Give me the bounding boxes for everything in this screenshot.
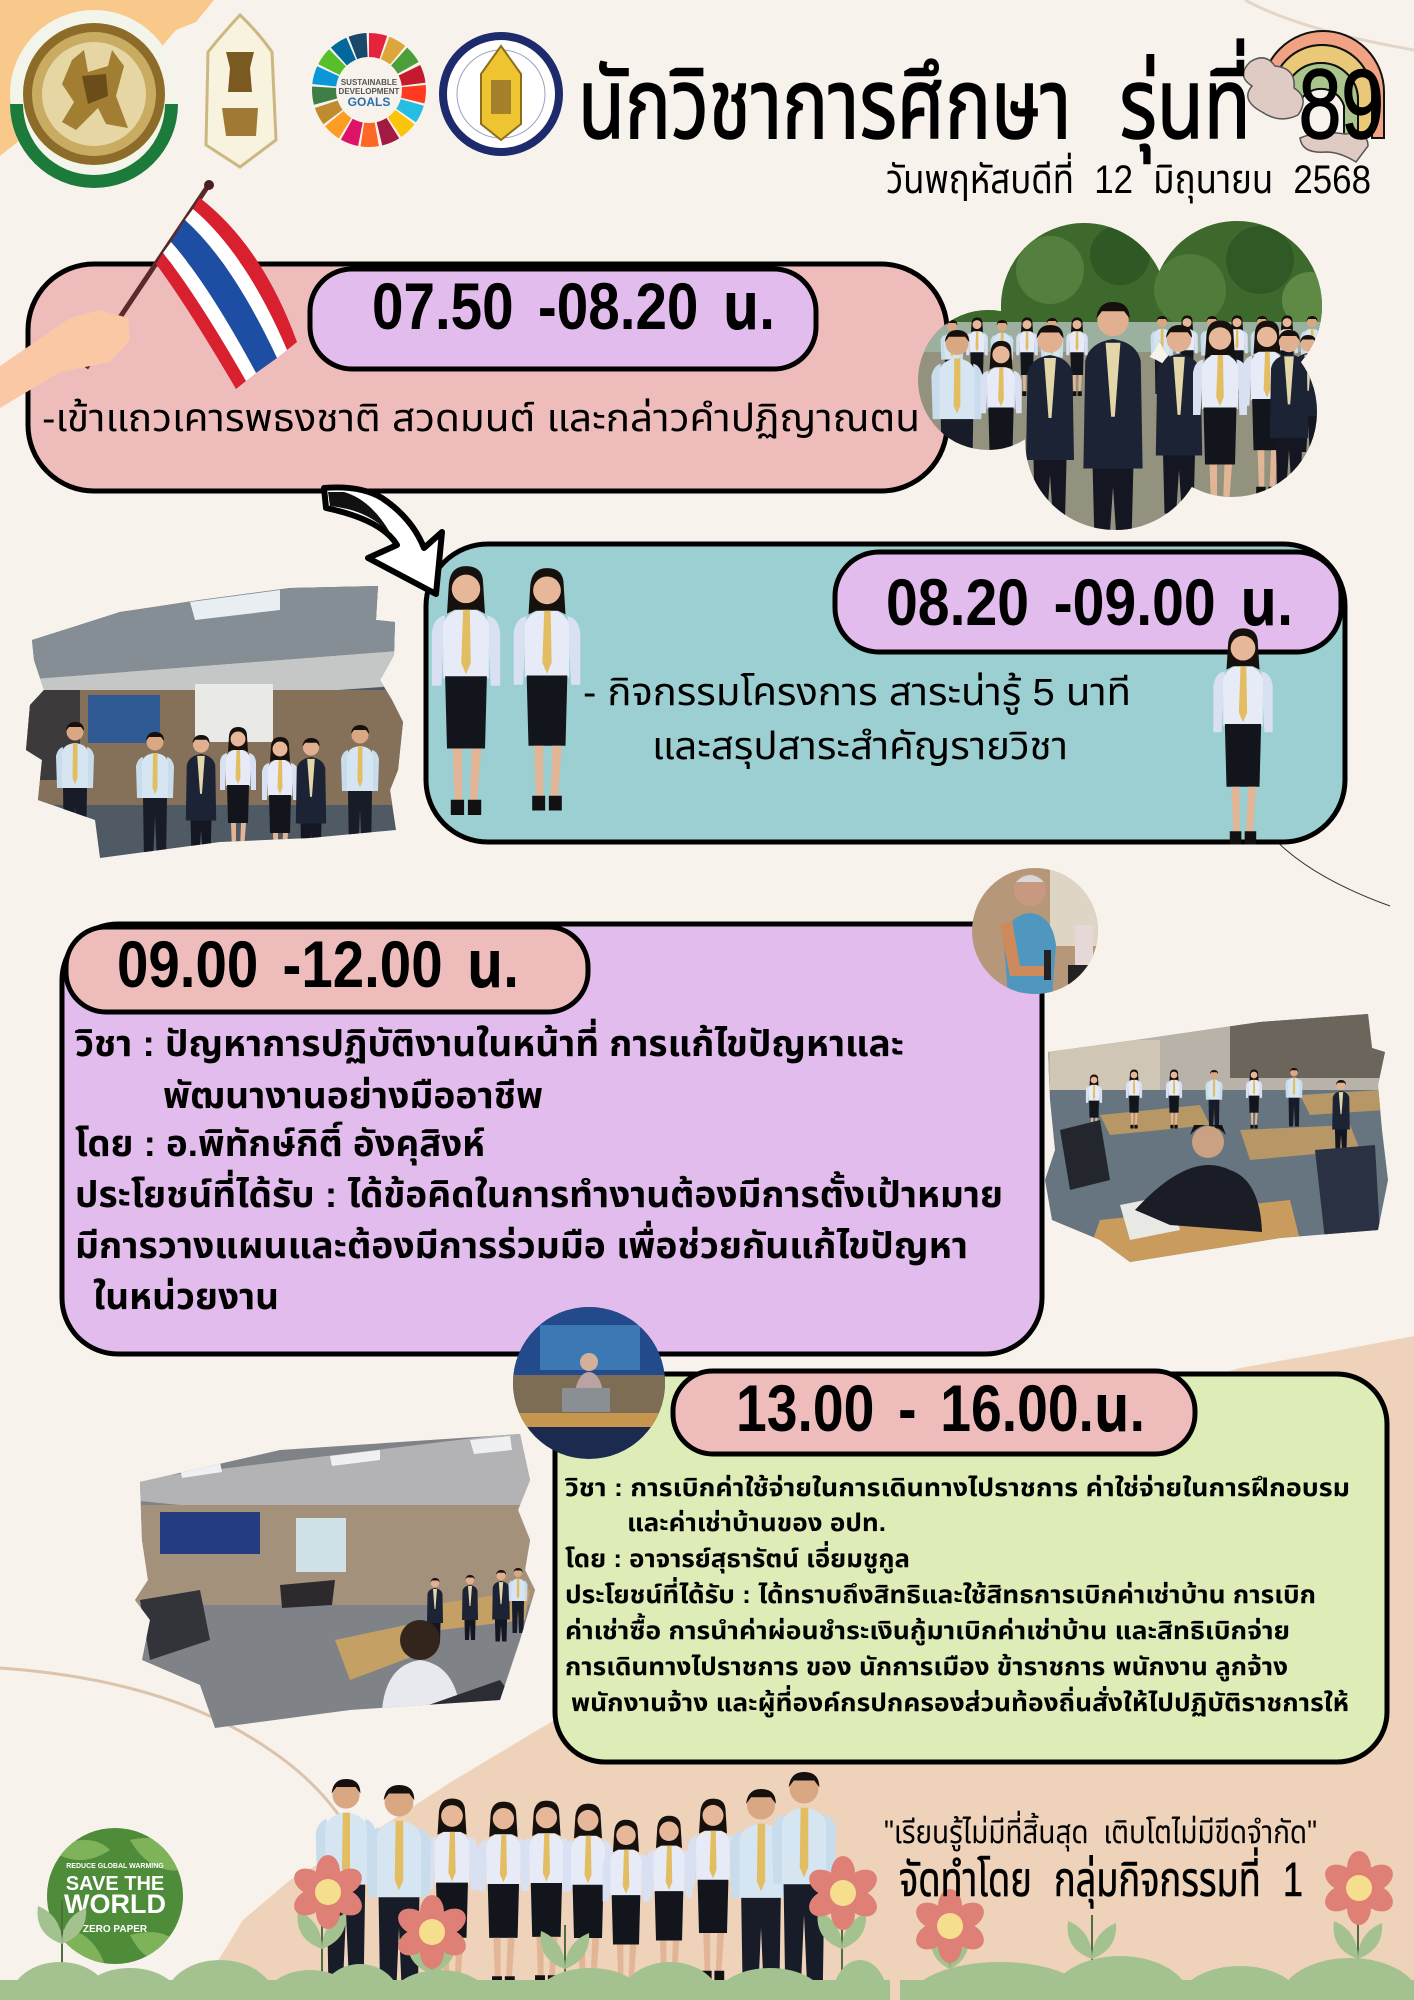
icon: rainbow with clouds — [1243, 31, 1384, 162]
photo: woman speaker right — [1213, 628, 1273, 844]
logo: sustainable development goals wheel: SUSTAINABLE — [341, 78, 398, 87]
panel 3 details: พัฒนางานอย่างมืออาชีพ — [163, 1075, 543, 1116]
photo: lecturer with microphone — [970, 866, 1100, 996]
logo: sustainable development goals wheel: DEVELOPMENT — [339, 87, 400, 96]
icon: save the world zero paper badge: SAVE THE — [66, 1873, 164, 1895]
panel 3 details: มีการวางแผนและต้องมีการร่วมมือ เพื่อช่วยกันแก้ไขปัญหา — [75, 1220, 968, 1266]
panel 4 details: โดย : อาจารย์สุธารัตน์ เอี่ยมชูกูล — [565, 1541, 910, 1574]
logo: sustainable development goals wheel — [305, 26, 433, 154]
panel 4 details: การเดินทางไปราชการ ของ นักการเมือง ข้าราชการ พนักงาน ลูกจ้าง — [565, 1653, 1288, 1682]
decoration: top-left orange brush — [0, 0, 214, 156]
panel: 13.00-16.00 — [555, 1374, 1387, 1762]
logo: course 89 badge — [443, 36, 559, 152]
arrow from panel 1 to panel 2 — [324, 487, 442, 594]
photo: group on stage — [20, 580, 410, 868]
decorative flowers and plants — [38, 1851, 1398, 2000]
photo: classroom — [1040, 1010, 1390, 1265]
time pill 4: 13.00 - 16.00.น. — [736, 1371, 1145, 1445]
photo: two women speakers — [432, 566, 580, 815]
icon: save the world zero paper badge: ZERO PAPER — [83, 1924, 148, 1935]
panel 3 details: ในหน่วยงาน — [93, 1276, 279, 1317]
panel 3 details: โดย : อ.พิทักษ์กิติ์ อังคุสิงห์ — [75, 1121, 485, 1165]
panel 4 details: ค่าเช่าซื้อ การนำค่าผ่อนชำระเงินกู้มาเบิกค่าเช่าบ้าน และสิทธิเบิกจ่าย — [565, 1613, 1290, 1646]
panel 2 description: และสรุปสาระสำคัญรายวิชา — [652, 726, 1068, 769]
photo: training room — [130, 1430, 540, 1730]
panel 4 details — [564, 1474, 1350, 1718]
icon: save the world zero paper badge: REDUCE GLOBAL WARMING — [66, 1863, 164, 1870]
photo: lecturer at podium — [510, 1305, 670, 1465]
panel: 08.20-09.00 — [426, 544, 1345, 842]
icon: hand holding thai flag — [0, 180, 297, 408]
panel 3 details: ประโยชน์ที่ได้รับ : ได้ข้อคิดในการทำงานต้องมีการตั้งเป้าหมาย — [75, 1169, 1003, 1215]
quote: "เรียนรู้ไม่มีที่สิ้นสุด เติบโตไม่มีขีดจำกัด" — [884, 1810, 1317, 1852]
panel 4 details: และค่าเช่าบ้านของ อปท. — [627, 1509, 886, 1537]
panel 4 details: ประโยชน์ที่ได้รับ : ได้ทราบถึงสิทธิและใช้สิทธการเบิกค่าเช่าบ้าน การเบิก — [565, 1577, 1316, 1609]
green hills — [0, 1956, 1414, 2000]
logo: shield emblem — [206, 15, 276, 167]
logo: department of local administration seal — [10, 10, 178, 188]
time pill 1: 07.50 -08.20 น. — [372, 269, 775, 343]
panel 3 details — [74, 1018, 1003, 1317]
panel 4 details: วิชา : การเบิกค่าใช้จ่ายในการเดินทางไปราชการ ค่าใช่จ่ายในการฝึกอบรม — [564, 1474, 1350, 1502]
panel 3 details: วิชา : ปัญหาการปฏิบัติงานในหน้าที่ การแก้ไขปัญหาและ — [74, 1018, 904, 1064]
panel: 09.00-12.00 — [62, 924, 1042, 1354]
time pill 3: 09.00 -12.00 น. — [117, 927, 519, 1001]
icon: save the world zero paper badge — [47, 1828, 185, 1965]
logo: sustainable development goals wheel: GOALS — [348, 95, 390, 109]
photo: team group — [316, 1772, 836, 2000]
decoration: bottom peach brush area — [194, 1336, 1414, 2000]
time pill 2: 08.20 -09.00 น. — [886, 565, 1293, 639]
panel 1 description: -เข้าแถวเคารพธงชาติ สวดมนต์ และกล่าวคำปฏิญาณตน — [42, 398, 920, 440]
icon: save the world zero paper badge: WORLD — [64, 1889, 166, 1919]
time pill 1 — [310, 269, 816, 369]
panel 2 description: - กิจกรรมโครงการ สาระน่ารู้ 5 นาที — [583, 672, 1131, 715]
panel: 07.50-08.20 — [28, 264, 947, 491]
photo: flag assembly crowd — [910, 220, 1338, 542]
time pill 2 — [835, 552, 1341, 652]
panel 2 description — [583, 672, 1131, 769]
panel 4 details: พนักงานจ้าง และผู้ที่องค์กรปกครองส่วนท้องถิ่นสั่งให้ไปปฏิบัติราชการให้ — [571, 1685, 1349, 1718]
